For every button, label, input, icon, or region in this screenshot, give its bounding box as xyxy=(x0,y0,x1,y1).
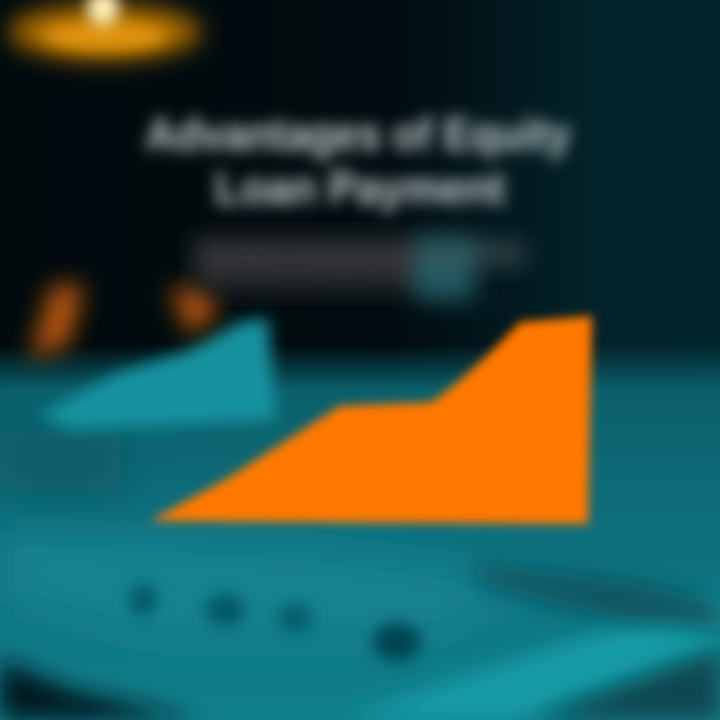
light band lower right xyxy=(340,592,720,720)
desk highlights xyxy=(0,530,720,720)
bottom corner shadows xyxy=(0,650,720,720)
teal chart shape xyxy=(38,318,276,430)
subtitle: Benefits of early loan repayment xyxy=(195,241,525,268)
lamp glow xyxy=(9,0,201,60)
title: Advantages of Equity xyxy=(146,108,571,160)
title xyxy=(146,108,571,214)
dark smudges on paper xyxy=(0,430,720,661)
teal desk surface xyxy=(0,345,720,720)
subtitle xyxy=(195,235,525,300)
title: Loan Payment xyxy=(215,162,505,214)
orange accent shapes xyxy=(30,285,218,358)
orange area chart xyxy=(150,316,592,524)
